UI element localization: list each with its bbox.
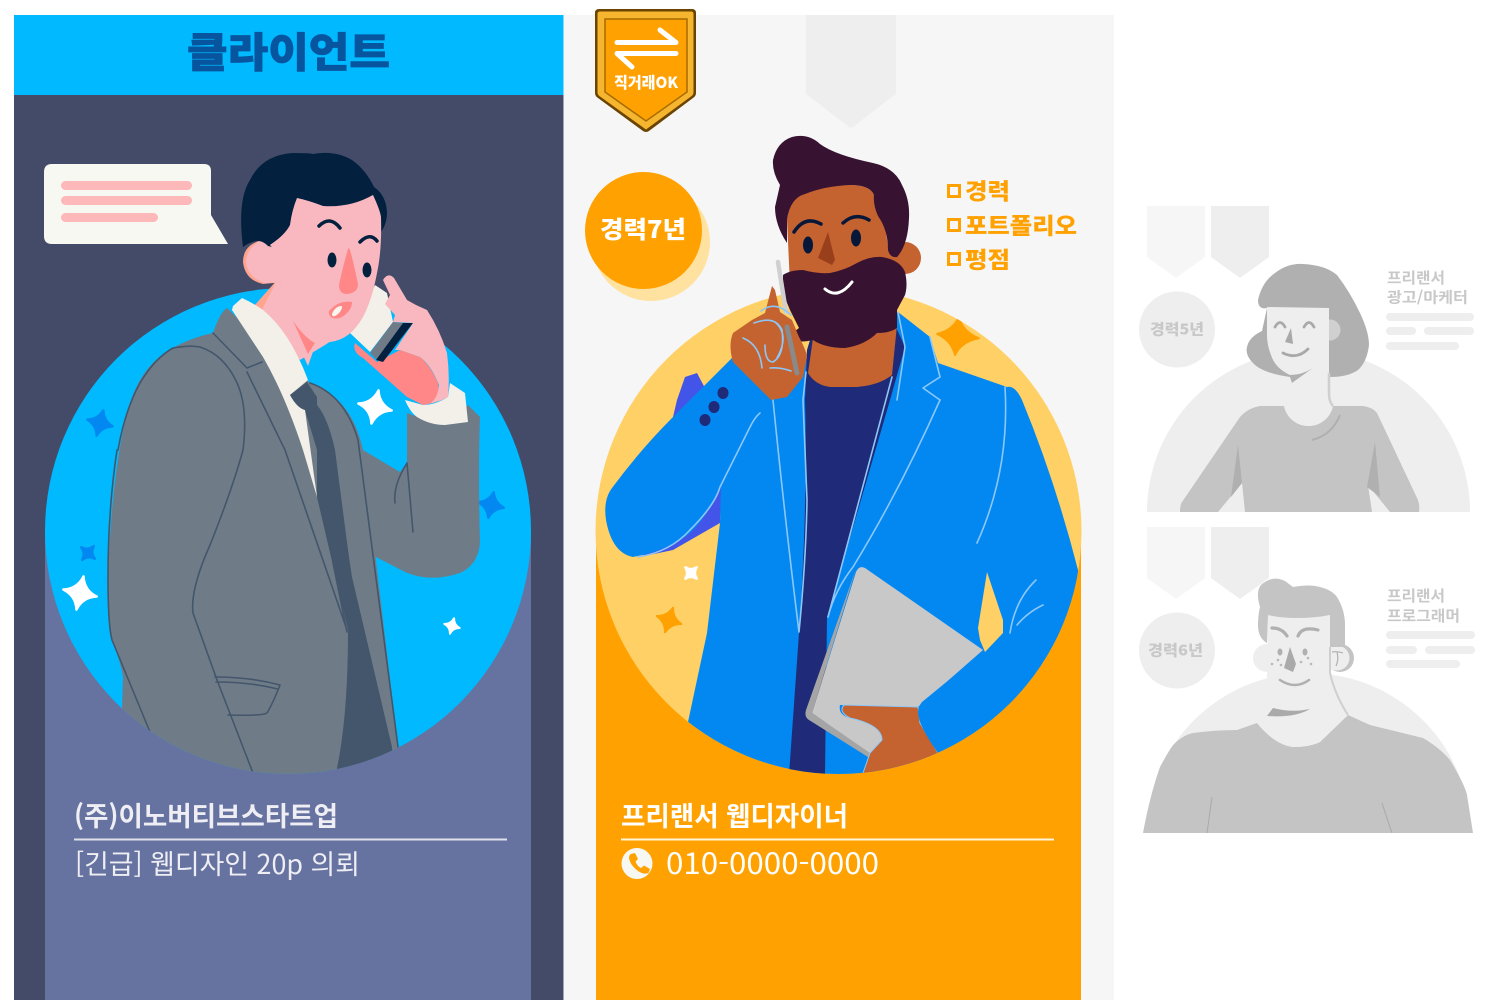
eyes — [328, 252, 336, 268]
freelancer title: 프리랜서 웹디자이너 — [621, 795, 848, 834]
hair — [241, 153, 387, 247]
freelancer card — [596, 531, 1081, 1000]
jacket lines — [773, 372, 807, 632]
nose — [818, 232, 835, 265]
purple sleeve shade and patch — [642, 487, 721, 556]
panel: featured freelancer — [564, 9, 1114, 1000]
career badge: 경력7년 — [600, 210, 686, 245]
role text — [1387, 585, 1460, 626]
nose — [339, 248, 358, 294]
career circle: 경력6년 — [1148, 640, 1203, 660]
skill checklist: 경력 — [965, 174, 1010, 206]
skill checklist: 포트폴리오 — [965, 209, 1077, 241]
pen and hand — [730, 262, 807, 400]
role text: 프리랜서 — [1387, 267, 1445, 288]
skill checklist — [948, 174, 1077, 275]
career circle — [1139, 612, 1215, 688]
phone hand — [354, 343, 438, 405]
role text: 프리랜서 — [1387, 585, 1445, 606]
neck and shadow — [255, 280, 340, 360]
tablet — [805, 569, 872, 757]
heading: client — [14, 15, 564, 95]
arch — [1147, 673, 1470, 833]
badge: direct deal: 직거래OK — [614, 71, 679, 93]
undershirt — [789, 325, 905, 775]
role text: 프로그래머 — [1387, 605, 1460, 626]
freelancer rule — [621, 838, 1054, 840]
hair — [773, 136, 909, 257]
placeholder bars — [1386, 313, 1474, 350]
arch — [1147, 350, 1470, 512]
badge: direct deal — [595, 9, 696, 132]
cuff — [405, 383, 468, 425]
skill checklist: 평점 — [965, 243, 1010, 275]
client card — [45, 531, 531, 1000]
client stars — [60, 387, 506, 636]
ghost bookmarks — [1147, 206, 1269, 278]
panel: freelancer marketer (ghosted) — [1139, 206, 1474, 512]
man figure — [1143, 579, 1473, 833]
freelancer illustration: bearded man — [605, 136, 1100, 800]
face — [270, 195, 381, 366]
career circle: 경력5년 — [1150, 318, 1204, 340]
eyebrows — [319, 221, 377, 242]
ear — [243, 240, 283, 284]
heading: client: 클라이언트 — [187, 19, 390, 79]
speech bubble — [44, 164, 228, 244]
career circle — [1139, 292, 1215, 368]
lower hand — [842, 704, 938, 773]
phone number: 010-0000-0000 — [666, 841, 879, 883]
shirt — [232, 298, 317, 497]
eyes — [803, 236, 813, 254]
smile — [825, 282, 852, 293]
ear — [889, 242, 921, 274]
placeholder bars — [1386, 631, 1475, 668]
right sleeve — [918, 570, 1078, 753]
chin shadow — [293, 321, 315, 354]
client company name: (주)이노버티브스타트업 — [74, 795, 338, 834]
ghost bookmarks — [1147, 527, 1269, 599]
client illustration: man on phone — [108, 153, 480, 800]
orange and white stars — [653, 315, 981, 636]
hand — [383, 275, 449, 405]
client rule — [74, 838, 507, 840]
jacket — [605, 312, 1078, 800]
face — [787, 185, 905, 285]
woman figure — [1180, 264, 1419, 512]
freelancer circle — [596, 288, 1082, 774]
role text — [1387, 267, 1468, 308]
panel: freelancer programmer (ghosted) — [1139, 527, 1475, 833]
raised arm sleeve — [363, 405, 480, 578]
ghost bookmark — [806, 15, 896, 128]
beard — [783, 257, 906, 348]
panel: client — [14, 15, 564, 1000]
buttons — [700, 387, 728, 426]
neck — [808, 325, 897, 387]
yellow notch — [978, 572, 1003, 652]
icon: phone — [622, 848, 652, 879]
suit body — [108, 298, 480, 800]
career badge — [585, 172, 710, 301]
tie — [290, 382, 395, 800]
client request: [긴급] 웹디자인 20p 의뢰 — [75, 843, 360, 882]
eyebrows — [794, 217, 869, 232]
mouth — [329, 302, 352, 318]
phone — [350, 285, 393, 352]
role text: 광고/마케터 — [1387, 286, 1468, 308]
suit lines — [118, 346, 253, 773]
client circle — [45, 288, 531, 774]
